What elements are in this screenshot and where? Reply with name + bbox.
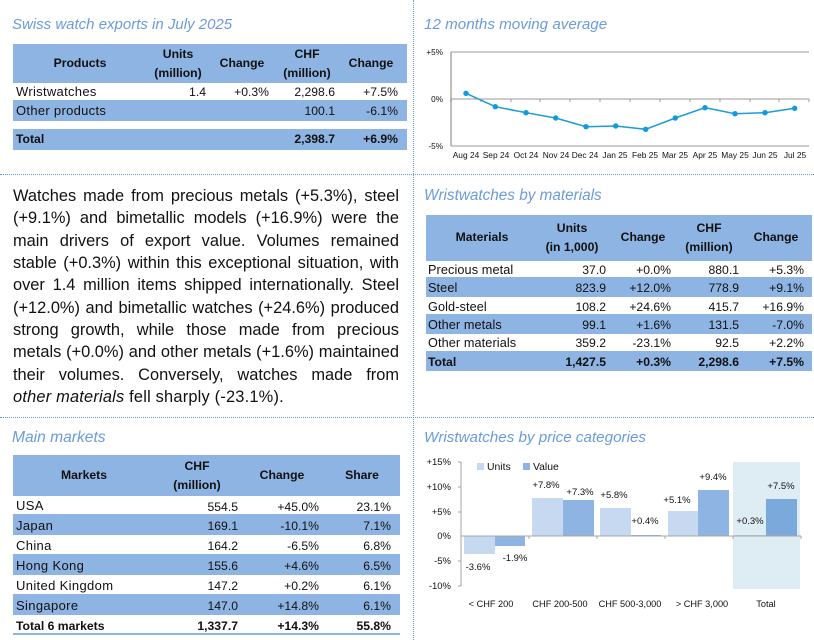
row: Other materials: 92.5 xyxy=(715,336,739,350)
materials header: Materials xyxy=(456,230,508,244)
legend xyxy=(477,462,559,473)
row: United Kingdom: 6.1% xyxy=(363,578,391,592)
row: Steel xyxy=(426,277,812,297)
row: Singapore: 147.0 xyxy=(208,598,238,612)
row: Total: Total xyxy=(16,132,44,146)
bar chart: price categories: -3.6% xyxy=(466,562,491,573)
bar chart: price categories: +5.8% xyxy=(600,490,628,501)
line chart: 12 months moving average xyxy=(426,48,810,160)
line chart: 12 months moving average: May 25 xyxy=(721,150,749,160)
row: China: China xyxy=(16,538,52,552)
text block: commentary: over 1.4 million items shipped internationally. Steel xyxy=(13,276,399,294)
table header: (million) xyxy=(283,66,331,80)
row: Hong Kong: 6.5% xyxy=(363,558,391,572)
row: China: 164.2 xyxy=(208,538,238,552)
materials header xyxy=(426,215,812,261)
row: Total: +7.5% xyxy=(769,355,804,369)
line chart: 12 months moving average: +5% xyxy=(426,48,443,57)
line chart: 12 months moving average: Oct 24 xyxy=(514,150,539,160)
row: Other metals: +1.6% xyxy=(636,318,671,332)
materials header: Units xyxy=(557,221,587,235)
row: Other metals: -7.0% xyxy=(772,318,804,332)
table: products xyxy=(13,44,407,150)
bar chart: price categories: 0% xyxy=(437,531,452,542)
row: Hong Kong: +4.6% xyxy=(284,558,319,572)
line chart: 12 months moving average: Feb 25 xyxy=(632,150,658,160)
line chart: 12 months moving average: Dec 24 xyxy=(572,150,599,160)
row: Precious metal: 880.1 xyxy=(708,263,739,277)
line chart: 12 months moving average: -5% xyxy=(428,142,443,151)
row: Japan: 169.1 xyxy=(208,518,238,532)
row: Wristwatches: Wristwatches xyxy=(16,84,97,99)
text block: commentary: Watches made from precious metals (+5.3%), steel xyxy=(13,187,399,205)
materials header: CHF xyxy=(696,221,722,235)
row: Total 6 markets: Total 6 markets xyxy=(16,618,105,632)
row: Steel: +9.1% xyxy=(769,281,804,295)
bar chart: price categories: +7.5% xyxy=(767,481,795,492)
markets header: Markets xyxy=(61,468,107,482)
bar chart: price categories: +7.3% xyxy=(566,487,594,498)
bar chart: price categories: Total xyxy=(756,599,776,609)
row: Total 6 markets: 1,337.7 xyxy=(197,618,238,632)
table header: Change xyxy=(349,56,393,70)
text block: commentary: (+9.1%) and bimetallic models (+16.9%) were the xyxy=(13,209,399,227)
line chart: 12 months moving average: Aug 24 xyxy=(453,150,480,160)
row: Wristwatches xyxy=(16,84,398,99)
row: Other materials: Other materials xyxy=(428,336,516,350)
row: China: 6.8% xyxy=(363,538,391,552)
row: Total: 2,298.6 xyxy=(698,355,739,369)
text block: commentary: main drivers of export value. Volumes remained xyxy=(13,232,399,250)
row: United Kingdom: +0.2% xyxy=(284,578,319,592)
bar chart: price categories: -5% xyxy=(434,556,452,567)
text block: commentary: (+12.0%) and bimetallic watches (+24.6%) produced xyxy=(13,299,399,317)
row: Total: +0.3% xyxy=(636,355,671,369)
row: Japan: Japan xyxy=(16,518,53,532)
row: Total xyxy=(426,351,812,371)
line chart: 12 months moving average: Mar 25 xyxy=(662,150,688,160)
row: United Kingdom: United Kingdom xyxy=(16,578,113,592)
row: Steel: Steel xyxy=(428,281,457,295)
legend: Units xyxy=(487,462,511,473)
row: China: -6.5% xyxy=(287,538,319,552)
row: United Kingdom: 147.2 xyxy=(208,578,238,592)
row: Wristwatches: 2,298.6 xyxy=(294,85,335,99)
row: USA xyxy=(16,498,391,514)
row: Steel: +12.0% xyxy=(629,281,671,295)
row: Total 6 markets: +14.3% xyxy=(277,618,319,632)
bar chart: price categories: -10% xyxy=(429,581,452,592)
row: China xyxy=(16,538,391,552)
materials header: Change xyxy=(754,230,798,244)
row: Other products: -6.1% xyxy=(366,104,398,118)
row: Precious metal: +0.0% xyxy=(636,263,671,277)
materials header: (million) xyxy=(685,240,733,254)
row: Wristwatches: +0.3% xyxy=(234,85,269,99)
bar chart: price categories: +7.8% xyxy=(532,480,560,491)
line chart: 12 months moving average: Jul 25 xyxy=(784,150,807,160)
row: USA: 554.5 xyxy=(208,500,238,514)
materials header: Change xyxy=(621,230,665,244)
bar chart: price categories xyxy=(426,457,802,609)
bar chart: price categories: +0.3% xyxy=(736,516,764,527)
row: Precious metal: 37.0 xyxy=(582,263,606,277)
text block: commentary: stable (+0.3%) within this exceptional situation, with xyxy=(13,254,399,272)
row: Gold-steel: 415.7 xyxy=(708,300,739,314)
row: USA: +45.0% xyxy=(277,500,319,514)
row: Other materials: 359.2 xyxy=(576,336,606,350)
bar chart: price categories: +5.1% xyxy=(663,495,691,506)
row: Other materials xyxy=(428,336,804,350)
row: Gold-steel: +24.6% xyxy=(629,300,671,314)
row: Japan xyxy=(13,514,400,535)
line chart: 12 months moving average: 0% xyxy=(431,95,443,104)
row: Singapore xyxy=(13,594,400,615)
bar chart: price categories: -1.9% xyxy=(503,553,528,564)
line chart: 12 months moving average: Sep 24 xyxy=(483,150,510,160)
bar chart: price categories: CHF 200-500 xyxy=(532,599,588,609)
row: Total 6 markets: 55.8% xyxy=(356,618,391,632)
legend: Value xyxy=(533,462,559,473)
bar chart: price categories: CHF 500-3,000 xyxy=(599,599,661,609)
row: Other products: Other products xyxy=(16,103,106,118)
markets header: Share xyxy=(345,468,379,482)
row: United Kingdom xyxy=(16,578,391,592)
bar chart: price categories: < CHF 200 xyxy=(469,599,513,609)
bars xyxy=(464,490,797,554)
row: Steel: 823.9 xyxy=(576,281,606,295)
row: Other metals xyxy=(426,314,812,334)
title: 12 months moving average: 12 months moving average xyxy=(424,16,607,33)
row: Total: 1,427.5 xyxy=(565,355,606,369)
line chart: 12 months moving average: Apr 25 xyxy=(693,150,718,160)
bar chart: price categories: +5% xyxy=(432,507,452,518)
text block: commentary: their volumes. Conversely, watches made from xyxy=(13,366,399,384)
row: Singapore: 6.1% xyxy=(363,598,391,612)
table header: (million) xyxy=(154,66,202,80)
bar chart: price categories: +15% xyxy=(426,457,452,468)
row: Other metals: Other metals xyxy=(428,318,502,332)
table header: Change xyxy=(220,56,264,70)
markets header: Change xyxy=(260,468,304,482)
table: materials xyxy=(426,215,812,371)
row: Precious metal: +5.3% xyxy=(769,263,804,277)
row: Other metals: 99.1 xyxy=(582,318,606,332)
row: Hong Kong: Hong Kong xyxy=(16,558,84,572)
row: Gold-steel: +16.9% xyxy=(762,300,804,314)
title: Wristwatches by price categories: Wristwatches by price categories xyxy=(424,429,646,446)
text block: commentary: other materials fell sharply (-23.1%). xyxy=(13,388,284,406)
table header xyxy=(13,44,407,83)
row: Total 6 markets xyxy=(13,615,400,635)
row: Gold-steel xyxy=(428,300,804,314)
row: USA: 23.1% xyxy=(356,500,391,514)
markets header xyxy=(13,455,400,496)
row: Gold-steel: 108.2 xyxy=(576,300,606,314)
row: Japan: 7.1% xyxy=(363,518,391,532)
title: Main markets: Main markets xyxy=(12,429,106,446)
row: Wristwatches: 1.4 xyxy=(189,85,206,99)
row: Japan: -10.1% xyxy=(280,518,319,532)
row: Hong Kong: 155.6 xyxy=(208,558,238,572)
row: Other materials: +2.2% xyxy=(769,336,804,350)
row: Total xyxy=(13,129,407,150)
title: Swiss watch exports: Swiss watch exports in July 2025 xyxy=(12,16,232,33)
text block: commentary: strong growth, while those made from precious xyxy=(13,321,399,339)
line chart: 12 months moving average: Jan 25 xyxy=(602,150,628,160)
text block: commentary xyxy=(13,187,399,406)
row: Other metals: 131.5 xyxy=(708,318,739,332)
line chart: 12 months moving average: Nov 24 xyxy=(543,150,570,160)
row: Total: 2,398.7 xyxy=(294,132,335,146)
row: Gold-steel: Gold-steel xyxy=(428,300,487,314)
bar chart: price categories: +9.4% xyxy=(699,472,727,483)
row: Other products xyxy=(13,100,407,121)
table header: Products xyxy=(54,56,106,70)
bar chart: price categories: +0.4% xyxy=(631,516,659,527)
row: Steel: 778.9 xyxy=(708,281,739,295)
table header: CHF xyxy=(294,47,320,61)
row: Total: Total xyxy=(428,355,456,369)
row: Other materials: -23.1% xyxy=(632,336,671,350)
row: Wristwatches: +7.5% xyxy=(363,85,398,99)
line chart: 12 months moving average: Jun 25 xyxy=(752,150,778,160)
table header: Units xyxy=(163,47,193,61)
row: Other products: 100.1 xyxy=(304,104,335,118)
row: Total: +6.9% xyxy=(363,132,398,146)
bar chart: price categories: +10% xyxy=(426,482,452,493)
row: USA: USA xyxy=(16,498,44,512)
markets header: CHF xyxy=(184,459,210,473)
title: Wristwatches by materials: Wristwatches by materials xyxy=(424,187,602,204)
materials header: (in 1,000) xyxy=(546,240,598,254)
table: main markets xyxy=(13,455,400,635)
bar chart: price categories: > CHF 3,000 xyxy=(676,599,728,609)
text block: commentary: metals (+0.0%) and other metals (+1.6%) maintained xyxy=(13,343,399,361)
row: Precious metal xyxy=(428,263,804,277)
row: Singapore: +14.8% xyxy=(277,598,319,612)
markets header: (million) xyxy=(173,478,221,492)
row: Precious metal: Precious metal xyxy=(428,263,513,277)
row: Singapore: Singapore xyxy=(16,598,78,612)
row: Hong Kong xyxy=(13,554,400,575)
